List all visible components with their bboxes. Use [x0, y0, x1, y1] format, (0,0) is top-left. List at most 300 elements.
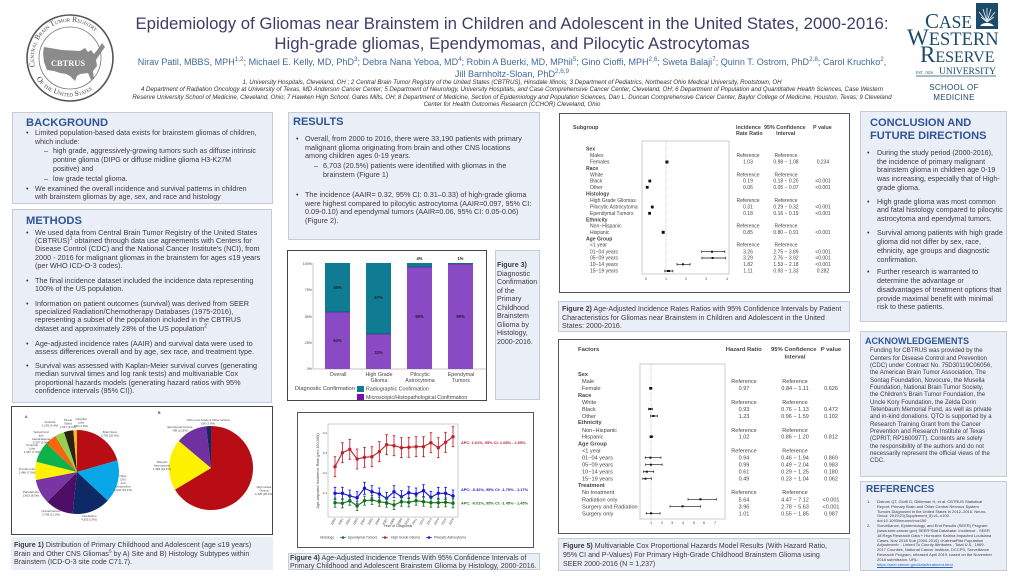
caption text: figure 3: Histology, — [497, 329, 528, 337]
chart: figure 2 incidence rate ratio forest plot: 2 — [685, 277, 687, 281]
chart: figure 5 hazard ratio forest plot: Reference — [731, 490, 757, 496]
chart: figure 5 hazard ratio forest plot: Non−Hispanic — [582, 428, 617, 434]
caption text: figure 3: 2000-2016. — [497, 338, 533, 346]
text: – — [314, 161, 318, 170]
text: • — [26, 276, 29, 284]
chart: pie B by histology: High Grade — [257, 485, 272, 489]
chart: stacked bars diagnostic confirmation: Pilocytic — [410, 372, 430, 378]
authors: Nirav Patil, MBBS, MPH1,2; Michael E. Kelly, MD, PhD3; Debra Nana Yeboa, MD4; Robin A Buerki, MD, MPhil5; Gino Cioffi, MPH2,6; Sweta Balaji7; Quinn T. Ostrom, PhD2,8; Carol Kruchko2, — [138, 56, 886, 67]
methods bullet: data: (per WHO ICD-O-3 codes). — [35, 261, 122, 270]
methods bullet: rates: Age-adjusted incidence rates (AAIR) and survival data were used to — [35, 339, 253, 348]
panel: figure 4 chart frame — [297, 412, 534, 548]
chart: figure 5 hazard ratio forest plot: Reference — [731, 379, 757, 385]
chart: figure 5 hazard ratio forest plot: 6 — [703, 521, 705, 525]
reference two: Research Program, released April 2019, based on the November — [877, 552, 992, 557]
chart: figure 2 incidence rate ratio forest plot: Reference — [736, 198, 760, 204]
chart: figure 2 incidence rate ratio forest plot: 1 — [665, 277, 667, 281]
chart: figure 2 incidence rate ratio forest plot: Non−Hispanic — [590, 224, 622, 230]
caption text: figure 3: Figure 3) — [497, 261, 527, 269]
text: • — [26, 228, 29, 236]
chart: pie A by site: Lobe — [29, 446, 36, 450]
chart: incidence trends line chart: 2012 — [418, 517, 425, 526]
results bullet: incidence: (Figure 2). — [305, 216, 338, 225]
chart: figure 2 incidence rate ratio forest plot: White — [590, 172, 603, 178]
chart: figure 2 incidence rate ratio forest plot: 2.76 − 3.92 — [773, 256, 799, 262]
conclusion bullet three: ethnicity, age groups and diagnostic — [877, 247, 990, 255]
acknowledgements text: Uncle Kory Foundation, the Zelda Dorin — [870, 400, 976, 406]
results bullet: overall: Overall, from 2000 to 2016, there were 33,190 patients with primary — [305, 134, 522, 143]
caption text: figure 5 — [563, 542, 827, 568]
conclusion bullet three: Survival among patients with high grade — [877, 229, 1003, 237]
logo sunburst and wordmark: RESERVE — [920, 42, 995, 67]
panel: figure 2 caption — [558, 301, 850, 332]
text: – — [44, 147, 48, 155]
methods bullet: survival: Survival was assessed with Kaplan-Meier survival curves (generating — [35, 361, 257, 370]
chart: figure 2 incidence rate ratio forest plot: Incidence — [736, 125, 761, 131]
background sub-bullet one: pontine glioma (DIPG or diffuse midline glioma H3-K27M — [53, 156, 231, 164]
background bullet two — [26, 185, 247, 201]
chart: figure 2 incidence rate ratio forest plot: Interval — [776, 131, 796, 137]
logo: CBTRUS seal: Central Brain Tumor Registry — [29, 16, 98, 67]
chart: figure 5 hazard ratio forest plot: 0.76 − 1.13 — [781, 407, 809, 413]
results sub-bullet: 6,703 (20.5%) patients were identified with gliomas in the — [323, 161, 506, 170]
methods bullet: data: (CBTRUS)1 obtained through data use agreements with Centers for — [35, 236, 252, 245]
reference one: Ostrom QT, Gioffi G, Gittleman H, et al. CBTRUS Statistical — [877, 499, 982, 504]
methods bullet: outcomes: representing a subset of the population included in the CBTRUS — [35, 315, 241, 324]
panel: figure 3 chart frame — [287, 250, 487, 401]
background sub-bullet two: low grade tectal glioma. — [53, 175, 128, 183]
chart: figure 2 incidence rate ratio forest plot: 01−04 years — [590, 249, 618, 255]
chart: stacked bars diagnostic confirmation: Overall — [330, 372, 346, 378]
background sub-bullet one: positive) and — [53, 165, 93, 173]
chart: figure 5 hazard ratio forest plot: 0.062 — [824, 477, 838, 483]
chart: pie A by site: 1,027 (3.1%) — [60, 425, 76, 429]
results sub-bullet — [314, 161, 506, 179]
chart: figure 5 hazard ratio forest plot: 0.180 — [824, 470, 838, 476]
chart: figure 2 incidence rate ratio forest plot: Hispanic — [590, 230, 610, 236]
heading: acknowledgements: ACKNOWLEDGEMENTS — [865, 336, 969, 346]
caption text: figure 5: Figure 5) Multivariable Cox Proportional Hazards Model Results (With Hazard Ratio, — [563, 543, 827, 550]
chart: figure 5 hazard ratio forest plot: 0.46 − 1.94 — [781, 456, 809, 462]
chart: figure 2 incidence rate ratio forest plot: Age Group — [586, 236, 612, 242]
conclusion bullet four: determine the advantage or — [877, 277, 964, 285]
chart: pie B by histology: B — [158, 411, 161, 415]
chart: figure 2 incidence rate ratio forest plot: <0.001 — [815, 205, 831, 211]
chart: pie A by site: Gland — [64, 422, 72, 426]
chart: pie B by histology: 789 (11.8%) — [172, 428, 188, 432]
conclusion bullet one — [867, 149, 1000, 192]
chart: incidence trends line chart: Ependymal Tumors — [348, 536, 378, 540]
chart: stacked bars diagnostic confirmation: 75% — [305, 288, 313, 292]
chart: stacked bars diagnostic confirmation: Tumors — [452, 378, 470, 384]
chart: incidence trends line chart: 0.2 — [323, 471, 327, 475]
chart: pie A by site: Parietal lobe — [23, 490, 39, 494]
text: • — [867, 268, 869, 276]
background bullet two: with brainstem gliomas by age, sex, and race and histology — [35, 193, 221, 201]
reference two: 2017 Counties, National Cancer Institute, DCCPS, Surveillance — [877, 547, 989, 552]
chart: figure 5 hazard ratio forest plot: Reference — [782, 400, 808, 406]
chart: figure 5 hazard ratio forest plot: Factors — [578, 347, 600, 353]
chart: figure 2 incidence rate ratio forest plot: 0.29 − 0.32 — [773, 205, 799, 211]
chart: incidence trends line chart: 2010 — [404, 517, 411, 526]
chart: figure 5 hazard ratio forest plot: Black — [582, 407, 596, 413]
chart: figure 5 hazard ratio forest plot: Other — [582, 414, 596, 420]
caption text: figure 1: Brain and Other CNS Gliomas5 by A) Site and B) Histology Subtypes within — [14, 549, 249, 558]
chart: figure 2 incidence rate ratio forest plot: High Grade Gliomas — [590, 198, 636, 204]
logo: CBTRUS seal: Of the United States — [37, 76, 92, 96]
chart: stacked bars diagnostic confirmation: 50% — [305, 315, 313, 319]
acknowledgements text: Funding for CBTRUS was provided by the — [870, 348, 983, 354]
acknowledgements text: and in-kind donations. QTO is supported by a — [870, 414, 992, 420]
background bullet two: We examined the overall incidence and survival patterns in children — [35, 185, 247, 193]
chart: pie B by histology: Astrocytoma — [154, 464, 170, 468]
chart: figure 2 incidence rate ratio forest plot: Black — [590, 179, 603, 185]
chart: stacked bars diagnostic confirmation: 67% — [374, 295, 383, 300]
caption text: figure 3: Brainstem — [497, 312, 529, 320]
methods bullet: survival: median survival times and log rank tests) and multivariable Cox — [35, 369, 238, 378]
chart: figure 2 incidence rate ratio forest plot: Males — [590, 153, 604, 159]
chart: figure 2 incidence rate ratio forest plot: Subgroup — [573, 125, 599, 131]
chart: figure 2 incidence rate ratio forest plot: Pilocytic Astrocytoma — [590, 205, 638, 211]
chart: figure 5 hazard ratio forest plot: 0.55 − 1.85 — [781, 511, 809, 517]
chart: figure 5 hazard ratio forest plot: Reference — [782, 379, 808, 385]
authors — [138, 56, 886, 78]
text: • — [296, 134, 299, 143]
acknowledgements text: CDC. — [870, 458, 885, 464]
logo sunburst and wordmark — [907, 3, 999, 77]
reference one: Tumors Diagnosed in the United States in 2012–2016. Neuro- — [877, 509, 986, 514]
panel: results — [288, 112, 540, 240]
chart: figure 2 incidence rate ratio forest plot: Females — [590, 160, 610, 166]
chart: figure 5 hazard ratio forest plot: 3.96 — [739, 504, 749, 510]
chart: incidence trends line chart: 2014 — [433, 517, 440, 526]
chart: pie A by site: 1,307 (3.9%) — [33, 440, 49, 444]
chart: pie A by site: Cranial Nerves — [41, 509, 61, 513]
chart: figure 2 incidence rate ratio forest plot: <0.001 — [815, 256, 831, 262]
chart: figure 2 incidence rate ratio forest plot: 0.93 − 1.33 — [773, 269, 799, 275]
background sub-bullet one: high grade, aggressively-growing tumors such as diffuse intrinsic — [53, 147, 256, 155]
reference one: doi:10.1093/neuonc/noz150 — [877, 518, 926, 523]
conclusion bullet four: disadvantages of treatment options that — [877, 286, 1001, 294]
chart: pie A by site: Ventricle — [44, 420, 56, 424]
heading: conclusion and future directions — [870, 117, 986, 142]
chart: figure 2 incidence rate ratio forest plot: <0.001 — [815, 249, 831, 255]
results bullet: overall — [296, 134, 522, 160]
reference two: 2018 submission. URL: — [877, 557, 918, 562]
chart: figure 5 hazard ratio forest plot: 1 — [650, 521, 652, 525]
chart: pie A by site: Occipital — [75, 417, 87, 421]
chart: figure 5 hazard ratio forest plot: 0.97 — [739, 386, 749, 392]
chart: figure 2 incidence rate ratio forest plot: 0.05 − 0.07 — [773, 185, 799, 191]
caption text: figure 5: 95% CI and P-Values) For Primary High-Grade Childhood Brainstem Glioma using — [563, 552, 820, 559]
acknowledgements text: the American Brain Tumor Association, The — [870, 370, 986, 376]
chart: pie A by site: and — [39, 434, 44, 438]
chart: pie A by site: Cauda Equina — [32, 437, 51, 441]
methods bullet: data — [26, 228, 260, 270]
chart: figure 2 incidence rate ratio forest plot: 0.98 − 1.08 — [773, 160, 799, 166]
chart: figure 5 hazard ratio forest plot: 0.84 − 1.11 — [781, 386, 809, 392]
methods bullet: rates: assess differences overall and by age, sex race, and treatment type. — [35, 347, 254, 356]
logo sunburst and wordmark: EST. 1826 — [916, 70, 933, 75]
chart: figure 5 hazard ratio forest plot: Reference — [731, 400, 757, 406]
chart: figure 2 incidence rate ratio forest plot: 95% Confidence — [764, 125, 806, 131]
chart: pie A by site: A — [25, 415, 28, 419]
chart: figure 2 incidence rate ratio forest plot: <0.001 — [815, 185, 831, 191]
chart: figure 2 incidence rate ratio forest plot: 3.29 — [743, 256, 753, 262]
chart: incidence trends line chart: 2005 — [367, 517, 374, 526]
chart: figure 5 hazard ratio forest plot: Hispanic — [582, 435, 604, 441]
chart: figure 2 incidence rate ratio forest plot: 15−19 years — [590, 269, 618, 275]
methods bullet: outcomes — [26, 298, 249, 333]
conclusion bullet one: brainstem glioma in children age 0-19 — [877, 166, 995, 174]
acknowledgements text: Research Training Grant from the Cancer — [870, 422, 981, 428]
conclusion bullet one: grade glioma. — [877, 184, 920, 192]
caption text: figure 2: States: 2000-2016. — [562, 322, 622, 330]
chart: figure 5 hazard ratio forest plot: 0.94 — [739, 456, 749, 462]
results bullet: overall: malignant glioma originating from brain and other CNS locations — [305, 143, 511, 152]
chart: pie A by site: 5,002 (15.1%) — [114, 488, 132, 492]
chart: incidence trends line chart: 2003 — [352, 517, 359, 526]
chart: figure 2 incidence rate ratio forest plot: P value — [813, 125, 832, 131]
chart: figure 2 incidence rate ratio forest plot: 0.06 — [743, 185, 753, 191]
caption text: figure 2 — [562, 305, 842, 330]
chart: figure 2 incidence rate ratio forest plot: <0.001 — [815, 211, 831, 217]
conclusion bullet four: risk to these patients. — [877, 303, 944, 311]
chart: pie A by site: Brain Stem — [103, 430, 118, 434]
chart: stacked bars diagnostic confirmation: Ependymal — [448, 372, 474, 378]
chart: figure 2 incidence rate ratio forest plot: 0.19 — [743, 179, 753, 185]
chart: figure 5 hazard ratio forest plot: 2 — [661, 521, 663, 525]
chart: incidence trends line chart: Age-adjusted Incidence Rate (per 100,000) — [315, 433, 320, 509]
chart: figure 5 hazard ratio forest plot: 0.29 − 1.25 — [781, 470, 809, 476]
chart: pie A by site: Frontal Lobe — [19, 467, 36, 471]
heading: results: RESULTS — [293, 116, 344, 128]
results sub-bullet: brainstem (Figure 1) — [323, 170, 388, 179]
chart: figure 5 hazard ratio forest plot: 1.01 — [739, 511, 749, 517]
chart: pie A by site: Unspecified — [115, 484, 131, 488]
panel: conclusion — [860, 111, 1007, 322]
panel: methods — [12, 209, 272, 403]
caption text: figure 2: Figure 2) Age-Adjusted Incidence Rates Ratios with 95% Confidence Intervals by Patient — [562, 305, 841, 313]
logo: Case Western Reserve University School of Medicine — [907, 3, 999, 102]
conclusion bullet one: was increasing, especially that of High- — [877, 175, 1000, 183]
caption text: figure 3: Childhood — [497, 304, 529, 312]
conclusion bullet two — [867, 198, 1003, 223]
conclusion bullet three — [867, 229, 1003, 264]
methods bullet: dataset: 100% of the US population. — [35, 284, 123, 293]
conclusion bullet two: astrocytoma and ependymal tumors. — [877, 215, 992, 223]
chart: figure 2 incidence rate ratio forest plot: <0.001 — [815, 262, 831, 268]
chart: figure 2 incidence rate ratio forest plot: 0.85 — [743, 230, 753, 236]
affiliations: 1. University Hospitals, Cleveland, OH ; 2 Central Brain Tumor Registry of the United States (CBTRUS), Hinsdale Illinois; 3 Department of Pediatrics, Northeast Ohio Medical University, Rootstown, OH — [243, 78, 781, 86]
chart: incidence trends line chart: 2009 — [396, 517, 403, 526]
logo: CBTRUS seal — [26, 14, 114, 102]
text: • — [867, 198, 869, 206]
chart: stacked bars diagnostic confirmation: 1% — [458, 256, 464, 261]
chart: pie A by site: 3,708 (11.2%) — [42, 512, 60, 516]
chart: figure 5 hazard ratio forest plot: 2.78 − 5.63 — [781, 504, 809, 510]
chart: pie A by site: Lobe — [78, 420, 85, 424]
chart: stacked bars diagnostic confirmation: 99% — [456, 314, 465, 319]
chart: pie B by histology: Glioma — [259, 488, 269, 492]
chart: incidence trends line chart: Pilocytic Astrocytoma — [434, 536, 466, 540]
text: • — [867, 229, 869, 237]
chart: figure 2 incidence rate ratio forest plot: Race — [586, 166, 598, 172]
caption text: figure 3: Glioma by — [497, 320, 529, 328]
chart: figure 5 hazard ratio forest plot: 0.472 — [824, 407, 838, 413]
panel: references — [860, 481, 1007, 571]
chart: incidence trends line chart: 2000 — [330, 517, 337, 526]
affiliations: 4 Department of Radiation Oncology at University of Texas, MD Anderson Cancer Center; 5 Department of Neurology, University Hospitals, and Case Comprehensive Cancer Center, Cleveland, OH; 6 Department of Population and Quantitative Health Sciences, Case Western — [141, 86, 883, 93]
chart: figure 2 incidence rate ratio forest plot: 1.03 — [743, 160, 753, 166]
caption text: figure 2: Characteristics for Gliomas near Brainstem in Children and Adolescent in the United — [562, 314, 825, 322]
caption text: figure 3 — [497, 261, 537, 346]
methods bullet: data: 2000 - 2016 for malignant gliomas in the brainstem for ages ≤19 years — [35, 253, 260, 262]
caption text: figure 4: Primary Childhood and Adolescent Brainstem Glioma by Histology, 2000-2016. — [290, 562, 537, 570]
results bullet: incidence: The incidence (AAIR= 0.32, 95% CI: 0.31–0.33) of high-grade glioma — [305, 190, 526, 199]
chart: figure 5 hazard ratio forest plot: 0.99 — [739, 463, 749, 469]
panel: figure 3 caption — [495, 250, 540, 400]
text: • — [26, 339, 29, 348]
chart: figure 5 hazard ratio forest plot: Reference — [782, 490, 808, 496]
chart: pie B by histology: 196 (3.0%) — [201, 422, 215, 426]
chart: incidence trends line chart: 2008 — [389, 517, 396, 526]
chart: incidence trends line chart: 2004 — [359, 517, 366, 526]
chart: stacked bars diagnostic confirmation: 100% — [303, 262, 313, 266]
panel: figure 2 forest plot frame — [559, 113, 850, 293]
chart: figure 5 hazard ratio forest plot: 0.96 − 1.59 — [781, 414, 809, 420]
conclusion bullet one: During the study period (2000-2016), — [877, 149, 993, 157]
methods bullet: survival: confidence intervals (95% CI)). — [35, 386, 134, 395]
chart: figure 5 hazard ratio forest plot: Reference — [782, 428, 808, 434]
chart: incidence trends line chart: 2006 — [374, 517, 381, 526]
chart: figure 5 hazard ratio forest plot: Treatment — [578, 483, 605, 489]
chart: incidence trends line chart: 0.3 — [323, 451, 327, 455]
chart: stacked bars diagnostic confirmation: 25% — [305, 341, 313, 345]
acknowledgements text: the responsibility of the authors and do not — [870, 444, 984, 450]
caption text: figure 4: Figure 4) Age-Adjusted Incidence Trends With 95% Confidence Intervals of — [290, 554, 526, 562]
chart: stacked bars diagnostic confirmation: Diagnostic Confirmation — [295, 386, 355, 392]
chart: incidence trends line chart: APC: -0.01%, 95% CI: -1.45% - 1.45% — [461, 500, 529, 506]
conclusion bullet three: confirmation. — [877, 256, 918, 264]
chart: figure 5 hazard ratio forest plot: 0.869 — [824, 456, 838, 462]
chart: figure 2 incidence rate ratio forest plot: <0.001 — [815, 179, 831, 185]
chart: figure 2 incidence rate ratio forest plot: 05−09 years — [590, 256, 618, 262]
methods bullet: outcomes: Information on patient outcomes (survival) was derived from SEER — [35, 298, 249, 308]
conclusion bullet two: High grade glioma was most common — [877, 198, 996, 206]
chart: figure 5 hazard ratio forest plot: 0.626 — [824, 386, 838, 392]
logo: Case Western Reserve University School of Medicine: MEDICINE — [933, 93, 975, 102]
background sub-bullet one — [44, 147, 256, 173]
chart: incidence trends line chart: 2002 — [345, 517, 352, 526]
methods bullet: outcomes: specialized Radiation/Chemotherapy Databases (1975-2016), — [35, 307, 233, 316]
chart: pie A by site: 2,457 (7.4%) — [24, 450, 40, 454]
chart: figure 5 hazard ratio forest plot: 0.23 − 1.04 — [781, 477, 809, 483]
chart: figure 5 hazard ratio forest plot: 0.49 − 2.04 — [781, 463, 809, 469]
chart: pie A by site: 4,302 (13%) — [81, 518, 97, 522]
chart: pie A by site: Pineal — [64, 418, 72, 422]
header: title: High-grade gliomas, Ependymomas, and Pilocytic Astrocytomas — [274, 34, 750, 52]
reference two — [867, 523, 992, 568]
affiliations: Reserve University School of Medicine, Cleveland, Ohio; 7 Hawken High School, Gates Mills, OH; 8 Department of Medicine, Section of Epidemiology and Population Sciences, Dan L. Duncan Comprehensive Cancer Center, Baylor College of Medicine, Houston, Texas; 9 Cleveland — [132, 94, 892, 101]
caption text: figure 1 — [14, 541, 251, 566]
caption text: figure 3: Primary — [497, 295, 521, 303]
chart: pie B by histology: 4,435 (66.2%) — [255, 492, 273, 496]
text: 1. — [867, 499, 870, 504]
chart: stacked bars diagnostic confirmation: 0% — [307, 367, 313, 371]
chart: pie A by site: Spinal Cord — [33, 430, 49, 434]
heading: conclusion and future directions: CONCLUSION AND — [870, 117, 971, 129]
chart: figure 5 hazard ratio forest plot: 0.61 — [739, 470, 749, 476]
chart: pie B by histology: Ependymal Tumors — [168, 425, 193, 429]
header: title: Epidemiology of Gliomas near Brainstem in Children and Adolescent in the United States, 2000-2016: — [135, 14, 889, 32]
affiliations: Center for Health Outcomes Research (CCHOR) Cleveland, Ohio — [424, 101, 600, 108]
authors: Jill Barnholtz-Sloan, PhD2,6,9 — [455, 67, 569, 78]
panel: figure 1 pie charts — [11, 406, 273, 535]
chart: figure 2 incidence rate ratio forest plot: 0.18 − 0.20 — [773, 179, 799, 185]
methods bullet: data: Disease Control (CDC) and the National Cancer Institute's (NCI), from — [35, 244, 260, 253]
chart: figure 2 incidence rate ratio forest plot: <0.001 — [815, 230, 831, 236]
text: • — [26, 185, 28, 193]
acknowledgements text — [870, 348, 992, 464]
conclusion bullet two: and fatal histology compared to pilocytic — [877, 206, 1003, 214]
acknowledgements text: Centers for Disease Control and Prevention — [870, 356, 987, 362]
reference two: https://seer.cancer.gov/data/treatment.html — [877, 562, 953, 567]
chart: stacked bars diagnostic confirmation: Microscopic/Histopathological Confirmation — [366, 395, 467, 401]
chart: figure 5 hazard ratio forest plot: Reference — [782, 449, 808, 455]
chart: stacked bars diagnostic confirmation: 96% — [415, 314, 424, 319]
chart: figure 2 incidence rate ratio forest plot: 0.282 — [817, 269, 829, 275]
chart: figure 5 hazard ratio forest plot: Ethnicity — [578, 420, 603, 426]
heading: references: REFERENCES — [866, 484, 934, 495]
chart: figure 5 hazard ratio forest plot: Hazard Ratio — [726, 347, 762, 353]
logo sunburst and wordmark: UNIVERSITY — [939, 67, 996, 77]
acknowledgements text: Tetenbaum Memorial Fund, as well as private — [870, 407, 992, 413]
affiliations — [132, 78, 892, 108]
chart: figure 5 hazard ratio forest plot: 95% Confidence — [771, 347, 817, 353]
chart: figure 5 hazard ratio forest plot: Reference — [731, 449, 757, 455]
caption text: figure 5: SEER 2000-2016 (N = 1,237) — [563, 561, 655, 568]
acknowledgements text: (CDC) under Contract No. 75D30119C06056, — [870, 363, 992, 369]
chart: figure 5 hazard ratio forest plot: 0.812 — [824, 435, 838, 441]
chart: figure 5 hazard ratio forest plot: 0.102 — [824, 414, 838, 420]
caption text: figure 4 — [290, 554, 537, 570]
reference two: Adjustment> - Linked To County Attributes - Total U.S., 1969- — [877, 542, 985, 547]
chart: incidence trends line chart: Year of Diagnosis — [384, 524, 413, 528]
chart: figure 2 incidence rate ratio forest plot: 1.82 — [743, 262, 753, 268]
chart: incidence trends line chart: 2016 — [448, 517, 455, 526]
chart: pie A by site: CNS — [120, 478, 126, 482]
chart: incidence trends line chart: 0.1 — [323, 491, 327, 495]
chart: stacked bars diagnostic confirmation: 33% — [374, 350, 383, 355]
chart: figure 5 hazard ratio forest plot: 0.49 — [739, 477, 749, 483]
chart: stacked bars diagnostic confirmation: 4% — [417, 256, 423, 261]
chart: stacked bars diagnostic confirmation: Glioma — [371, 378, 387, 384]
methods bullet: data: We used data from Central Brain Tumor Registry of the United States — [35, 228, 257, 236]
chart: figure 5 hazard ratio forest plot: 4.47 − 7.12 — [781, 497, 809, 503]
panel: figure 5 caption — [558, 538, 850, 571]
chart: stacked bars diagnostic confirmation: Astrocytoma — [405, 378, 435, 384]
chart: figure 5 hazard ratio forest plot: 0.93 — [739, 407, 749, 413]
results bullet: incidence — [296, 190, 531, 225]
chart: figure 2 incidence rate ratio forest plot: Reference — [774, 172, 798, 178]
chart: figure 2 incidence rate ratio forest plot: 10−14 years — [590, 262, 618, 268]
conclusion bullet four: provide maximal benefit with minimal — [877, 294, 993, 302]
heading: background: BACKGROUND — [26, 117, 108, 129]
chart: figure 5 hazard ratio forest plot: Radiation only — [582, 497, 618, 503]
acknowledgements text: the Children's Brain Tumor Foundation, the — [870, 392, 985, 398]
logo: CBTRUS seal: CBTRUS — [51, 59, 85, 68]
